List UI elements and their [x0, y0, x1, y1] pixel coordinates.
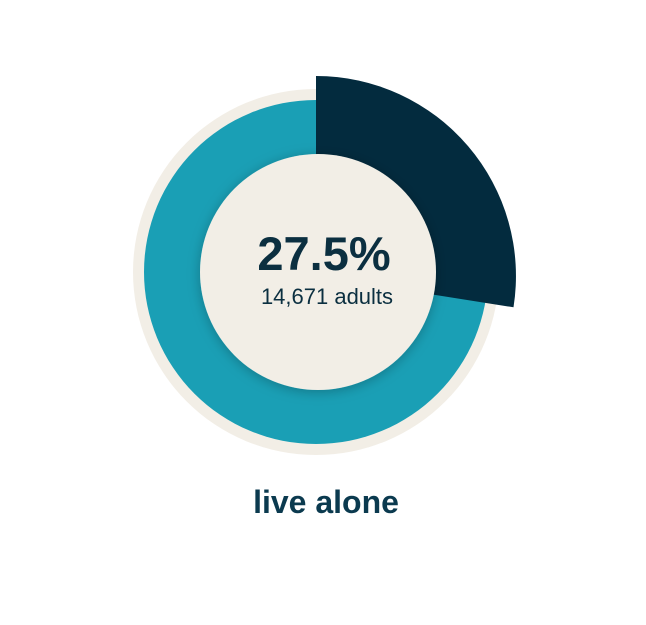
- count: 14,671 adults: [261, 284, 393, 309]
- dark slice 27.5%: [316, 76, 516, 307]
- percentage: 27.5%: [257, 227, 391, 280]
- label: live alone: [253, 484, 399, 520]
- teal ring: [144, 100, 488, 444]
- inner circle: [200, 154, 436, 390]
- outer beige ring: [133, 89, 499, 455]
